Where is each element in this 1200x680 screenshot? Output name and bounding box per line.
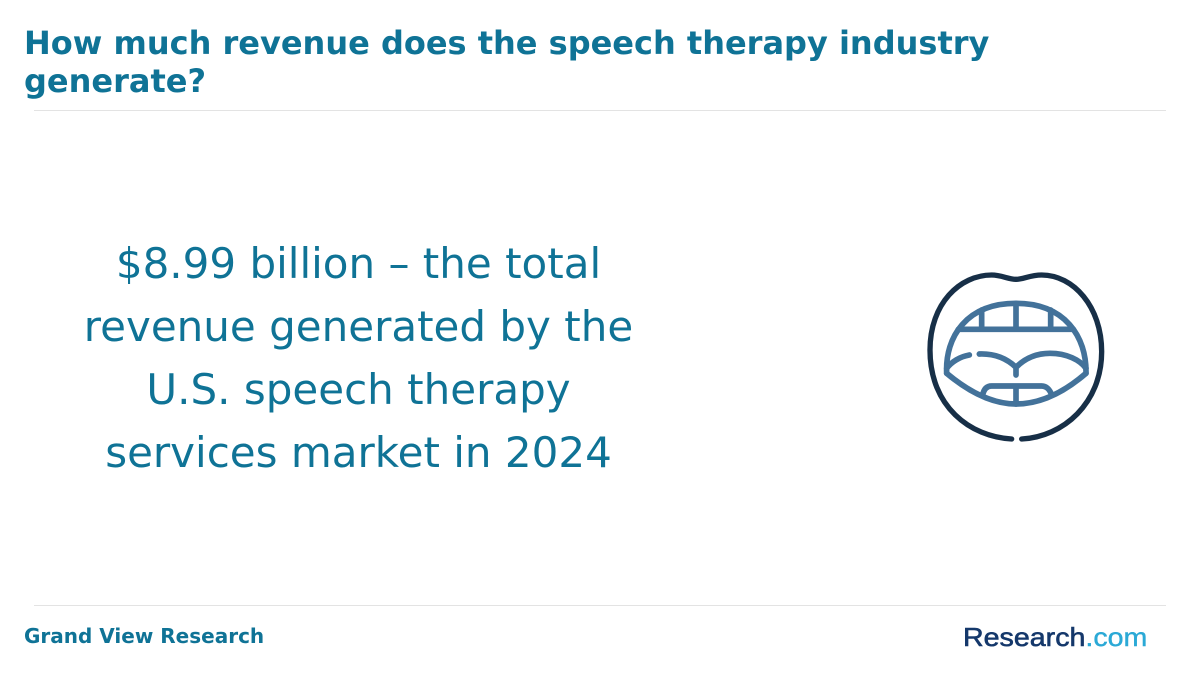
icon: open mouth	[927, 272, 1104, 442]
statistic text	[84, 239, 633, 477]
title	[24, 24, 989, 100]
statistic text: revenue generated by the	[84, 302, 633, 351]
logo: Research.com	[963, 622, 1147, 652]
title: generate?	[24, 62, 206, 100]
source label: Grand View Research	[24, 624, 264, 648]
statistic text: $8.99 billion – the total	[116, 239, 601, 288]
statistic text: U.S. speech therapy	[146, 365, 571, 414]
title: How much revenue does the speech therapy industry	[24, 24, 989, 62]
statistic text: services market in 2024	[105, 428, 612, 477]
